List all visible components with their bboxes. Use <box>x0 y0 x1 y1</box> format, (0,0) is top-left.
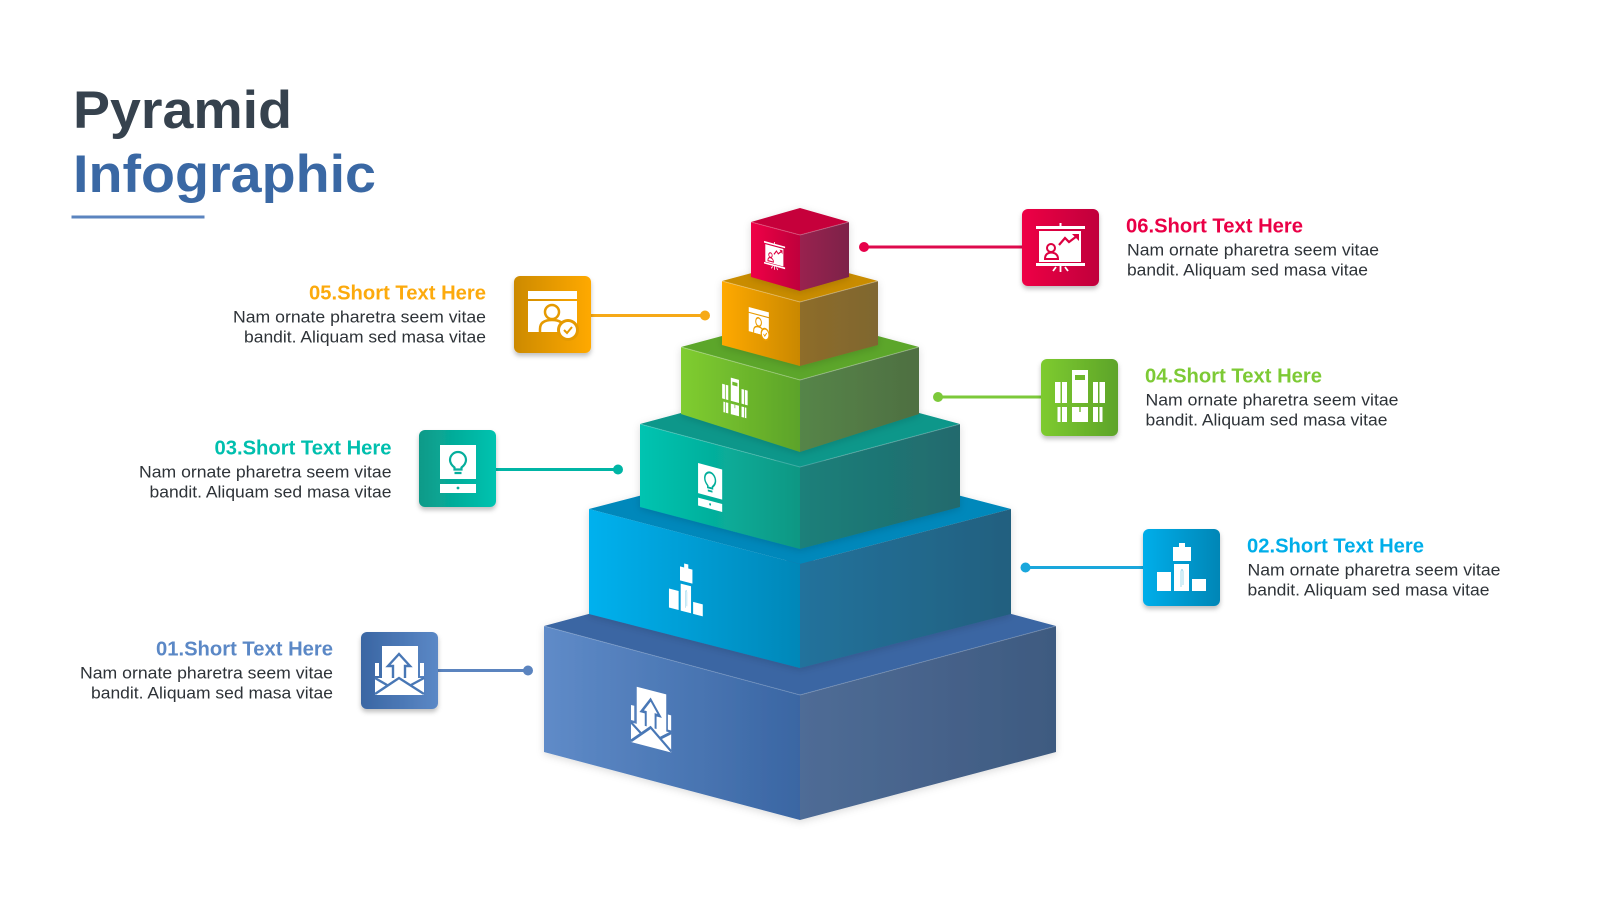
tier 1 base block <box>544 557 1056 820</box>
callout 02 <box>1020 529 1500 606</box>
tier 2 block <box>589 454 1011 668</box>
connector 02 <box>1020 562 1143 572</box>
title underline <box>72 216 204 218</box>
title line 1: Pyramid <box>73 81 292 140</box>
text 01: bandit. Aliquam sed masa vitae <box>91 684 333 702</box>
heading 02: 02.Short Text Here <box>1247 534 1424 558</box>
text 01: Nam ornate pharetra seem vitae <box>80 664 333 682</box>
tier 4 block <box>681 315 919 452</box>
text 05: bandit. Aliquam sed masa vitae <box>244 328 486 346</box>
connector 04 <box>933 392 1041 402</box>
callout 04 <box>933 359 1398 436</box>
text 06 <box>1127 240 1379 280</box>
title line 2: Infographic <box>73 145 376 204</box>
text 02 <box>1248 560 1500 600</box>
callout 06 <box>859 209 1379 286</box>
callout 01 <box>80 632 533 709</box>
text 01 <box>80 664 333 702</box>
icon: presentation on tier 6 <box>764 239 785 273</box>
icon: envelope on tier 1 <box>631 685 671 752</box>
icon: podium on tier 2 <box>669 560 703 616</box>
title <box>72 81 376 218</box>
heading 04: 04.Short Text Here <box>1145 364 1322 388</box>
text 04 <box>1146 390 1398 430</box>
icon tile 05 <box>514 276 591 353</box>
connector 06 <box>859 242 1022 252</box>
text 02: bandit. Aliquam sed masa vitae <box>1248 580 1490 600</box>
icon: suitcase on tier 4 <box>722 375 748 419</box>
text 04: Nam ornate pharetra seem vitae <box>1146 390 1398 410</box>
tier 3 block <box>640 381 960 549</box>
icon tile 01 <box>361 632 438 709</box>
text 05: Nam ornate pharetra seem vitae <box>233 308 486 326</box>
heading 06: 06.Short Text Here <box>1126 214 1303 238</box>
connector 01 <box>438 666 533 676</box>
text 03 <box>139 462 392 502</box>
icon: profile window on tier 5 <box>749 307 770 342</box>
callout 03 <box>139 430 623 507</box>
connector 05 <box>591 310 710 320</box>
heading 01: 01.Short Text Here <box>156 638 333 660</box>
text 04: bandit. Aliquam sed masa vitae <box>1146 410 1388 430</box>
icon tile 06 <box>1022 209 1099 286</box>
icon: phone bulb on tier 3 <box>698 463 722 512</box>
tier 6 top cube <box>751 208 849 291</box>
text 03: Nam ornate pharetra seem vitae <box>139 462 392 482</box>
text 03: bandit. Aliquam sed masa vitae <box>150 482 392 502</box>
callout 05 <box>233 276 710 353</box>
connector 03 <box>496 464 623 474</box>
pyramid <box>544 208 1056 820</box>
text 06: Nam ornate pharetra seem vitae <box>1127 240 1379 260</box>
tier 5 block <box>722 260 878 366</box>
heading 05: 05.Short Text Here <box>309 282 486 304</box>
icon tile 02 <box>1143 529 1220 606</box>
icon tile 04 <box>1041 359 1118 436</box>
heading 03: 03.Short Text Here <box>214 436 392 460</box>
icon tile 03 <box>419 430 496 507</box>
text 06: bandit. Aliquam sed masa vitae <box>1127 260 1368 280</box>
text 02: Nam ornate pharetra seem vitae <box>1248 560 1500 580</box>
text 05 <box>233 308 486 346</box>
